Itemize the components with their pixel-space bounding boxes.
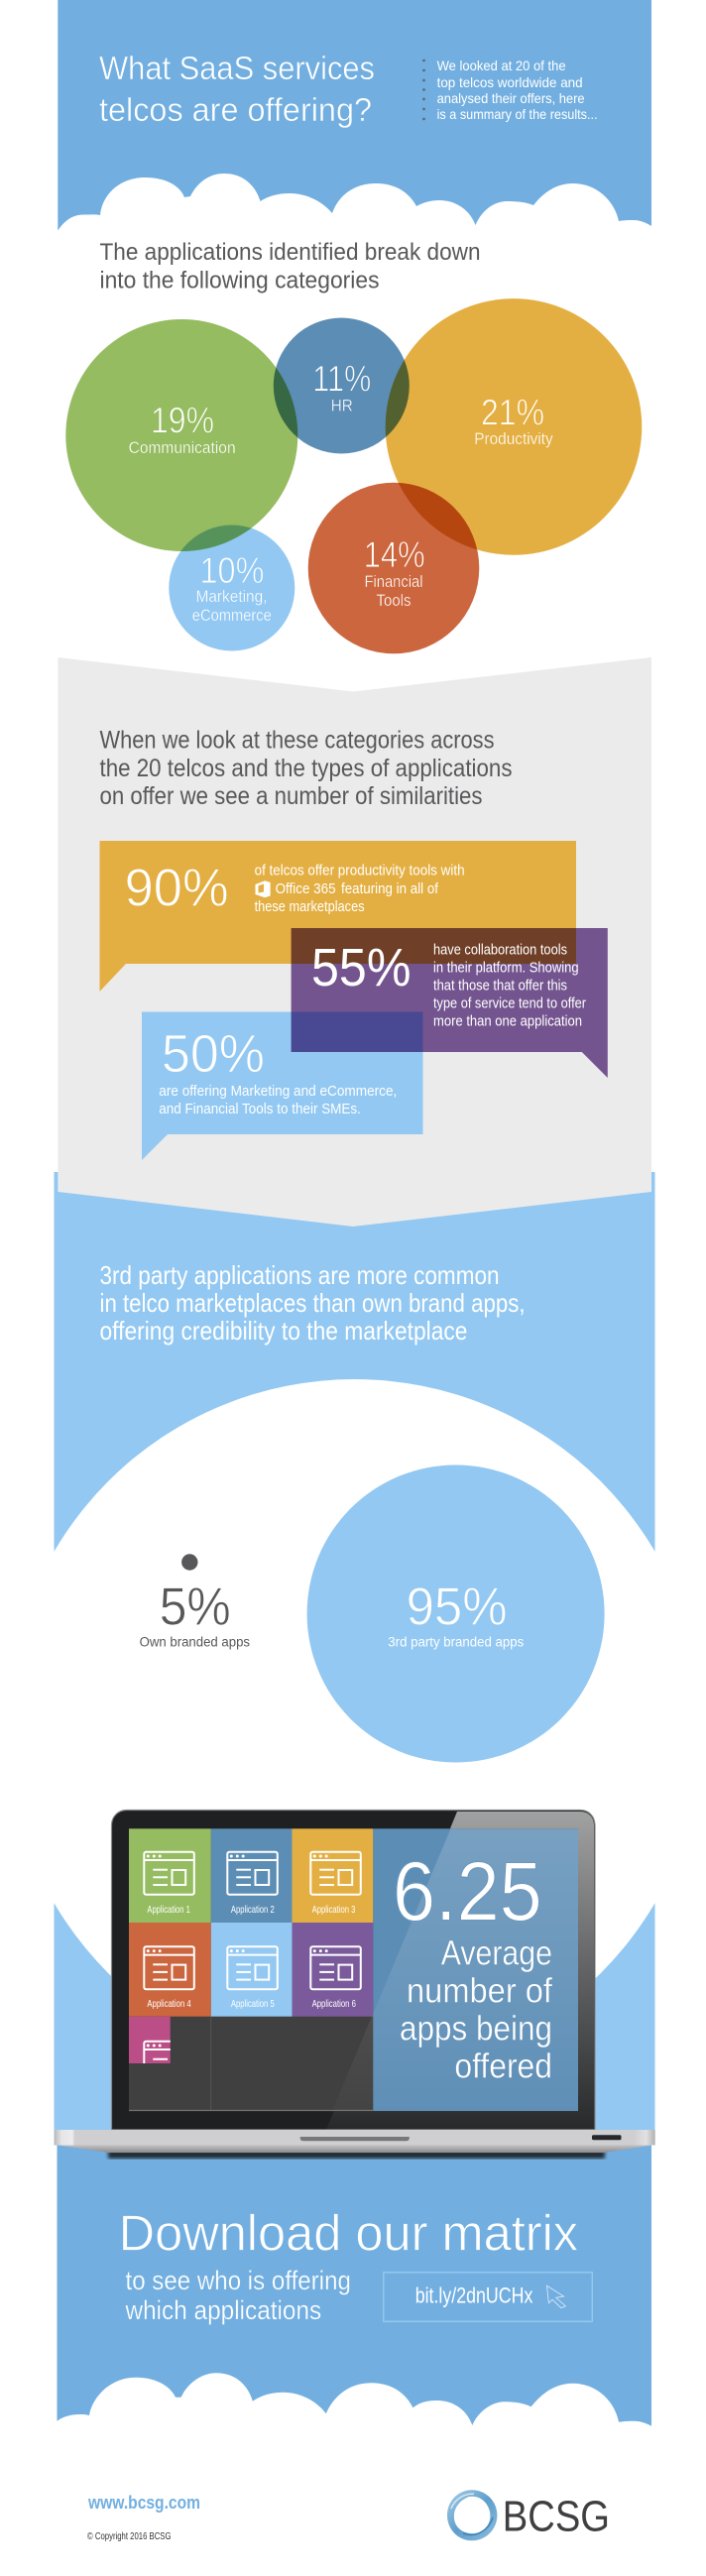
bubble: HR 11%: HR bbox=[331, 397, 353, 414]
bubble: Communication 19% bbox=[65, 319, 297, 551]
heading: categories bbox=[99, 239, 480, 293]
laptop lower lip bbox=[55, 2145, 655, 2153]
button: link: bit.ly/2dnUCHx bbox=[415, 2283, 532, 2307]
intro text: top telcos worldwide and bbox=[437, 74, 583, 90]
bubble: Productivity 21% bbox=[386, 298, 642, 555]
bubble: Marketing, eCommerce 10%: 10% bbox=[200, 550, 264, 591]
tile: Application 6 bbox=[292, 1923, 373, 2017]
text: who is offering: which applications bbox=[125, 2295, 321, 2325]
tile: Application 6: Application 6 bbox=[312, 1998, 356, 2010]
tile: Application 3: Application 3 bbox=[312, 1904, 356, 1916]
intro text: analysed their offers, here bbox=[437, 90, 585, 106]
bezel glare bbox=[326, 1812, 594, 2130]
stat: 6.25 average: offered bbox=[454, 2047, 552, 2085]
callout: 50%: are offering Marketing and eCommerce, bbox=[159, 1084, 397, 1100]
stat: own branded apps 5%: 5% bbox=[160, 1578, 231, 1637]
callout: 55%: have collaboration tools bbox=[433, 942, 567, 958]
logo: BCSG bbox=[447, 2490, 610, 2540]
laptop notch bbox=[300, 2137, 410, 2141]
callout: 50%: and Financial Tools to their SMEs. bbox=[159, 1102, 361, 1117]
heading: 3rd party applications: in telco marketplaces than own brand apps, bbox=[99, 1288, 526, 1318]
laptop bbox=[55, 1811, 655, 2159]
icon: office logo bbox=[256, 880, 271, 897]
callout: 90% bbox=[99, 841, 576, 992]
intro text: We looked at 20 of the bbox=[437, 58, 566, 73]
logo ring bbox=[447, 2490, 497, 2540]
screen glare bbox=[332, 1828, 578, 2111]
callout: 55%: more than one application bbox=[433, 1013, 582, 1029]
button: link bbox=[384, 2273, 592, 2321]
tile: Application 3 bbox=[292, 1828, 373, 1923]
bubble chart bbox=[65, 298, 642, 653]
tile: Application 2 bbox=[211, 1828, 292, 1923]
text: who is offering bbox=[125, 2266, 351, 2325]
callout: 55%: in their platform. Showing bbox=[433, 960, 579, 976]
bubble: Financial Tools 14%: 14% bbox=[364, 534, 425, 575]
bubble: Marketing, eCommerce 10%: eCommerce bbox=[192, 606, 272, 625]
callout: 50% bbox=[142, 1011, 422, 1160]
heading: similarities: the 20 telcos and the types of applications bbox=[99, 755, 512, 782]
stat: 6.25 average: number of bbox=[407, 1971, 552, 2010]
text: who is offering: to see who is offering bbox=[125, 2266, 351, 2295]
tile: Application 4 bbox=[129, 1923, 211, 2017]
stat: 6.25 average: 6.25 bbox=[393, 1845, 542, 1938]
callout: 55% bbox=[292, 928, 608, 1078]
callout: 90%: featuring in all of bbox=[341, 881, 439, 897]
callout: 90%: these marketplaces bbox=[255, 899, 365, 915]
callout: 90%: 90% bbox=[125, 859, 229, 918]
bubble: Communication 19%: Communication bbox=[129, 438, 236, 457]
bubble: Marketing, eCommerce 10% bbox=[169, 526, 294, 650]
title: What SaaS services bbox=[99, 50, 375, 86]
screen bbox=[129, 1828, 578, 2111]
stat: 6.25 average bbox=[393, 1845, 552, 2085]
copyright: © Copyright 2016 BCSG bbox=[87, 2530, 171, 2542]
bubble: Communication 19%: 19% bbox=[151, 401, 214, 440]
callout: 90%: Office 365 bbox=[276, 881, 336, 897]
stat: own branded apps 5%: Own branded apps bbox=[140, 1635, 250, 1650]
callout: 55%: 55% bbox=[311, 938, 411, 997]
tile: partial application 7 bbox=[129, 2017, 171, 2063]
logo: BCSG: BCSG bbox=[503, 2492, 610, 2540]
laptop base bbox=[55, 2130, 655, 2146]
intro text: is a summary of the results... bbox=[437, 106, 598, 122]
heading: similarities: When we look at these categories across bbox=[99, 726, 494, 754]
cloud divider: bottom bbox=[58, 2373, 651, 2449]
heading: 3rd party applications bbox=[99, 1260, 526, 1346]
laptop lid bbox=[111, 1811, 595, 2130]
heading: similarities bbox=[99, 726, 512, 810]
heading: categories: into the following categories bbox=[99, 268, 379, 293]
grey chevron panel bbox=[58, 657, 651, 1227]
bubble: HR 11% bbox=[274, 317, 410, 454]
header panel bbox=[58, 0, 651, 268]
tile: Application 5 bbox=[211, 1923, 292, 2017]
tile: Application 5: Application 5 bbox=[231, 1998, 275, 2010]
panel: average apps bbox=[373, 1828, 578, 2111]
icon: cursor bbox=[547, 2285, 565, 2308]
cloud divider: top bbox=[58, 174, 651, 268]
bubble: Financial Tools 14% bbox=[308, 483, 479, 653]
tile: Application 1: Application 1 bbox=[147, 1904, 190, 1916]
callout: 55%: that those that offer this bbox=[433, 978, 567, 994]
bubble: HR 11%: 11% bbox=[312, 359, 371, 400]
stat: 3rd party branded apps 95%: 3rd party branded apps bbox=[388, 1635, 525, 1650]
laptop shadow bbox=[108, 2151, 605, 2159]
tile: Application 1 bbox=[129, 1828, 211, 1923]
tile: Application 4: Application 4 bbox=[147, 1998, 191, 2010]
footer link: www.bcsg.com bbox=[87, 2493, 200, 2513]
heading: 3rd party applications: 3rd party applications are more common bbox=[99, 1260, 500, 1290]
bubble: Productivity 21%: Productivity bbox=[474, 429, 553, 448]
stat: 3rd party branded apps 95%: 95% bbox=[407, 1578, 508, 1637]
heading: categories: The applications identified break down bbox=[99, 239, 480, 266]
laptop port bbox=[592, 2135, 621, 2140]
white arch circle bbox=[6, 1379, 702, 2075]
heading: similarities: on offer we see a number of similarities bbox=[99, 782, 482, 810]
title bbox=[99, 50, 375, 128]
title: telcos are offering? bbox=[99, 91, 372, 128]
stat: 6.25 average: Average bbox=[441, 1934, 552, 1973]
callout: 50%: 50% bbox=[162, 1024, 265, 1084]
dotted separator bbox=[422, 59, 425, 120]
bubble: Financial Tools 14%: Financial bbox=[365, 572, 422, 591]
tile: Application 2: Application 2 bbox=[231, 1904, 275, 1916]
stat: 3rd party branded apps 95% bbox=[307, 1465, 605, 1763]
heading: download our matrix: Download our matrix bbox=[119, 2204, 578, 2261]
heading: 3rd party applications: offering credibility to the marketplace bbox=[99, 1316, 468, 1346]
bubble: Marketing, eCommerce 10%: Marketing, bbox=[196, 587, 268, 606]
download panel bbox=[58, 2142, 651, 2449]
callout: 55%: type of service tend to offer bbox=[433, 995, 586, 1011]
bubble: Financial Tools 14%: Tools bbox=[377, 591, 411, 610]
bubble: Productivity 21%: 21% bbox=[481, 393, 544, 432]
stat: own branded apps 5% bbox=[140, 1554, 250, 1650]
intro text bbox=[437, 58, 598, 122]
light blue section background bbox=[54, 1172, 654, 2146]
callout: 90%: of telcos offer productivity tools with bbox=[255, 864, 465, 879]
stat: 6.25 average: apps being bbox=[400, 2010, 552, 2049]
